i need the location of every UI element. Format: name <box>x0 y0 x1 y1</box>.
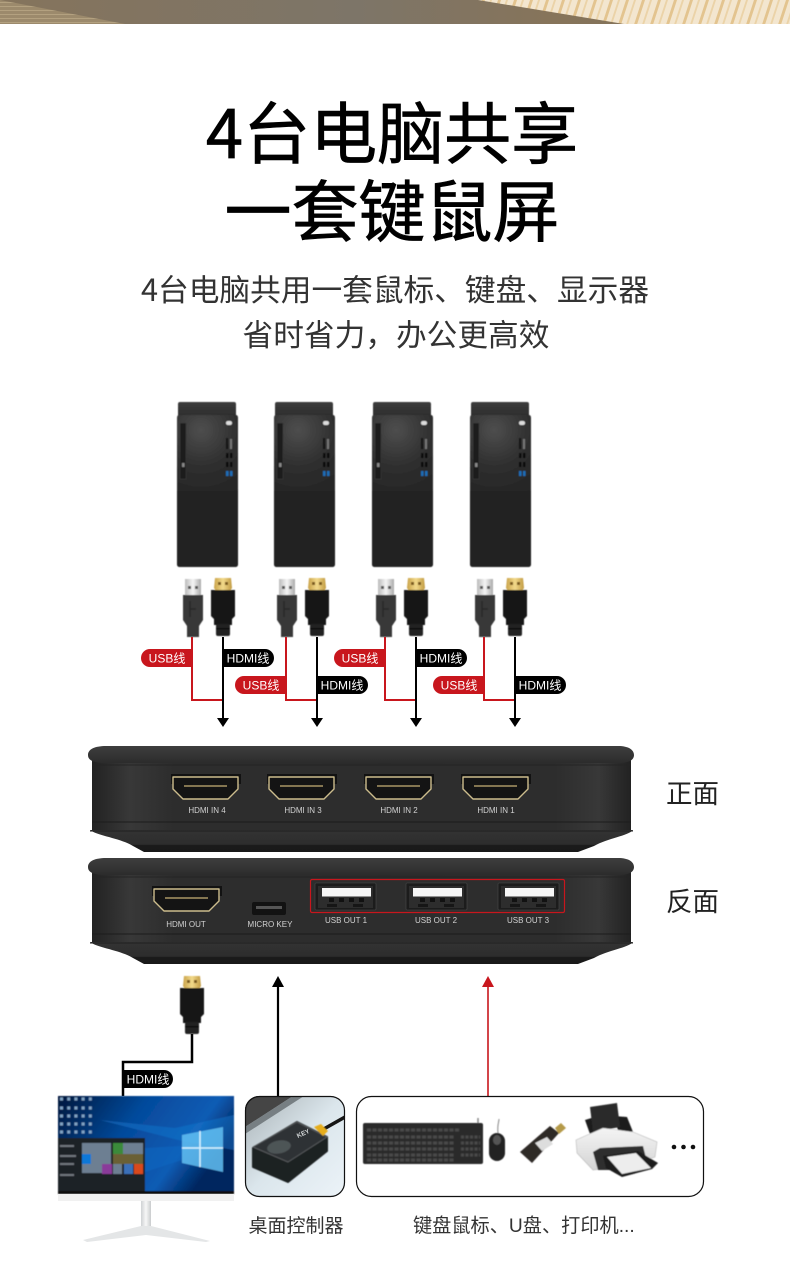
controller caption: 桌面控制器 <box>248 1215 344 1237</box>
subtitle: 4台电脑共用一套鼠标、键盘、显示器 <box>141 265 649 310</box>
subtitle <box>141 265 649 355</box>
cable tags: USB线 <box>149 652 185 666</box>
cable tags: USB线 <box>441 678 477 692</box>
panel: switch front: HDMI IN 3 <box>284 806 322 815</box>
panel: switch back: MICRO KEY <box>248 920 293 929</box>
panel: switch back: USB OUT 2 <box>415 916 458 925</box>
panel: switch back: USB OUT 1 <box>325 916 368 925</box>
panel: switch front: HDMI IN 2 <box>380 806 418 815</box>
cable tags: HDMI线 <box>519 678 561 692</box>
panel: desktop controller <box>245 1096 345 1197</box>
icon: keyboard <box>363 1118 483 1164</box>
cable tags: HDMI线 <box>227 652 269 666</box>
computer towers <box>177 402 531 567</box>
monitor cable <box>123 1034 192 1096</box>
side label: front: 正面 <box>666 779 719 809</box>
panel: switch front: HDMI IN 4 <box>188 806 226 815</box>
monitor cable tag: HDMI线 <box>127 1072 169 1086</box>
subtitle: 省时省力，办公更高效 <box>243 310 549 355</box>
title <box>206 81 578 256</box>
USB and HDMI plugs <box>183 578 527 637</box>
panel: switch back: USB OUT 3 <box>507 916 550 925</box>
panel: switch back: HDMI OUT <box>166 920 206 929</box>
panel: switch back <box>88 858 634 964</box>
cable tags: HDMI线 <box>321 678 363 692</box>
connection lines and arrows <box>192 637 521 727</box>
panel: desktop controller: KEY <box>296 1128 312 1140</box>
title: 4台电脑共享 <box>206 81 578 178</box>
arrow: devices to switch <box>482 976 494 1096</box>
peripherals caption: 键盘鼠标、U盘、打印机... <box>413 1215 635 1237</box>
top photo band <box>0 0 790 24</box>
panel: peripherals <box>356 1096 704 1196</box>
title: 一套键鼠屏 <box>224 159 560 256</box>
icon: printer <box>576 1103 658 1177</box>
cable tags: USB线 <box>342 652 378 666</box>
arrow: controller to switch <box>272 976 284 1096</box>
panel: switch front: HDMI IN 1 <box>477 806 515 815</box>
icon: monitor <box>58 1096 234 1242</box>
monitor cable tag <box>122 1070 173 1088</box>
cable tags <box>141 649 566 694</box>
HDMI plug to monitor <box>180 976 204 1034</box>
icon: ellipsis <box>672 1145 695 1149</box>
panel: switch front <box>88 746 634 852</box>
icon: USB drive <box>520 1123 566 1163</box>
side label: back: 反面 <box>666 887 719 917</box>
cable tags: HDMI线 <box>420 652 462 666</box>
icon: mouse <box>489 1119 505 1161</box>
cable tags: USB线 <box>243 678 279 692</box>
